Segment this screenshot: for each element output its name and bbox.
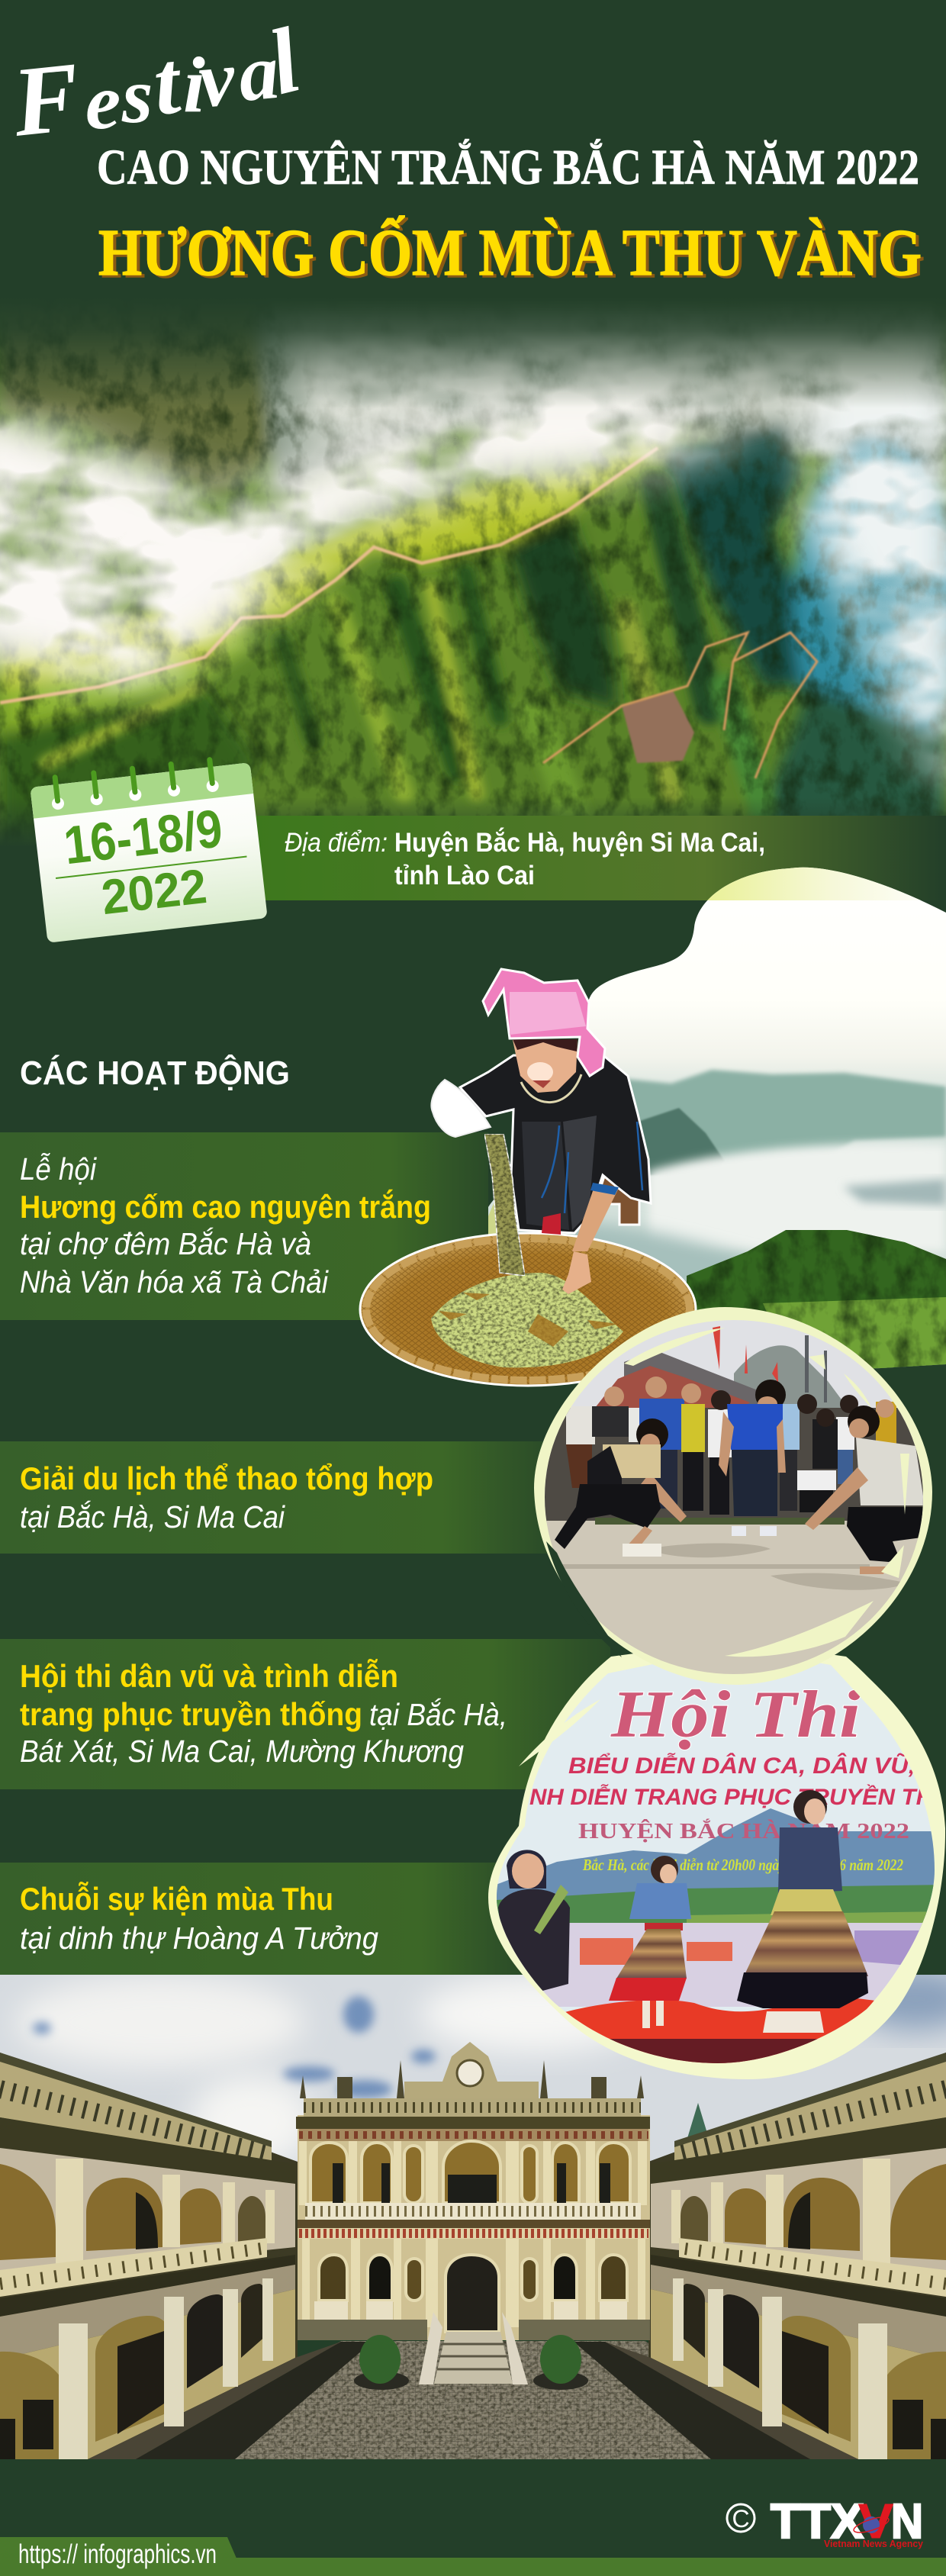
concrete ground: [534, 1521, 938, 1685]
lower columns: [59, 2278, 273, 2459]
ribs of the mountain: [46, 488, 763, 832]
banner line 1: BIỂU DIỄN DÂN CA, DÂN VŨ,: [568, 1753, 915, 1779]
bottom fade: [0, 797, 946, 847]
red embroidery: [542, 1213, 561, 1235]
copyright symbol: [727, 2504, 755, 2533]
red stage: [488, 1997, 946, 2068]
hero photo: mountain road in mist: [0, 298, 946, 847]
title: Festival handwriting: i: [183, 41, 205, 129]
activity band 1: [0, 1132, 488, 1320]
title: Festival handwriting: s: [121, 52, 153, 140]
upper arches: [311, 2141, 630, 2203]
dark walkway strip: [136, 2342, 372, 2459]
activity 1 text: tại chợ đêm Bắc Hà và: [20, 1226, 311, 1261]
frame: [534, 1307, 932, 1685]
activity 3 text: trang phục truyền thống: [20, 1696, 362, 1732]
town field: [488, 1923, 946, 2007]
banner title: Hội Thi: [610, 1678, 861, 1752]
courtyard paving: [145, 2341, 809, 2459]
dark peak: [638, 1108, 725, 1175]
lower frieze: [0, 2265, 295, 2359]
roof balustrades: [304, 2098, 641, 2117]
roof balustrade: [0, 2060, 272, 2164]
stool: [595, 1158, 639, 1225]
date: 16-18/9: [61, 798, 225, 875]
upper frieze: [299, 2129, 648, 2141]
activity 1 text: [20, 1151, 431, 1299]
activity 4 text: Chuỗi sự kiện mùa Thu: [20, 1880, 333, 1917]
ridge road: [0, 448, 658, 703]
title: Festival handwriting: t: [149, 32, 187, 134]
activity 1 text: Nhà Văn hóa xã Tà Chải: [20, 1264, 330, 1299]
TTXVN logo: TTX: [771, 2494, 864, 2549]
location text line 2: tỉnh Lào Cai: [394, 861, 535, 890]
child dancer: [609, 1856, 691, 2028]
top fade: [0, 298, 946, 408]
walkway: [88, 2342, 341, 2459]
upper dark openings: [333, 2163, 610, 2203]
bridge deck: [592, 1366, 750, 1412]
location band: [256, 816, 946, 900]
potted plants: [354, 2335, 588, 2390]
hillside colour masses: [0, 298, 946, 847]
crowd backdrop: [543, 1408, 928, 1522]
upper frieze: [0, 2148, 295, 2278]
activity 3 text: Bát Xát, Si Ma Cai, Mường Khương: [20, 1734, 464, 1769]
sea of clouds: [648, 1144, 946, 1251]
bare arm: [572, 1184, 618, 1251]
centre player: [719, 1380, 786, 1536]
bamboo pole: [595, 1518, 845, 1525]
activity band 2: [0, 1441, 553, 1554]
mist clouds: [0, 305, 946, 794]
title: Festival handwriting: v: [195, 34, 240, 124]
lower frieze: [299, 2228, 648, 2239]
base: [298, 2320, 427, 2340]
terraced field: [763, 1297, 946, 1373]
url text: https:// infographics.vn: [18, 2539, 217, 2569]
upper arches: [0, 2164, 56, 2260]
activity band 4: [0, 1863, 526, 1975]
TTXVN logo: [771, 2494, 924, 2549]
divider: [56, 856, 246, 878]
frame: [488, 1641, 945, 2079]
mountains: [496, 1808, 946, 1923]
cornice: [296, 2117, 650, 2129]
dark cornice: [0, 2255, 295, 2317]
face: [513, 1040, 578, 1093]
necklace: [521, 1074, 581, 1103]
calendar date card: [29, 752, 268, 943]
title block: [7, 8, 925, 291]
sky: [0, 1975, 946, 2162]
green hills: [687, 1230, 946, 1373]
activities heading: CÁC HOẠT ĐỘNG: [20, 1053, 290, 1092]
bottom strip: [0, 2558, 946, 2576]
activity 4 text: tại dinh thự Hoàng A Tưởng: [20, 1921, 378, 1956]
title: Festival handwriting: F: [7, 42, 85, 158]
agency name: Vietnam News Agency: [824, 2538, 924, 2549]
location text line 1: Huyện Bắc Hà, huyện Si Ma Cai,: [394, 827, 765, 858]
activity 1 text: Hương cốm cao nguyên trắng: [20, 1188, 431, 1225]
white bowl: [431, 1080, 491, 1137]
TTXVN logo: N: [891, 2494, 923, 2549]
right player: [805, 1406, 925, 1574]
woman pouring green rice into tray: [360, 969, 696, 1386]
portrait woman left: [498, 1850, 570, 1993]
cornice: [0, 2117, 295, 2184]
adult dancer: [737, 1790, 868, 2033]
right wing: [574, 2053, 946, 2459]
photo: [488, 1641, 946, 2069]
frame dark gap: [546, 1541, 622, 1657]
valley roads: [543, 633, 817, 778]
hand: [562, 1251, 591, 1294]
courtyard mansion photo: [0, 1969, 946, 2459]
copyright symbol: C: [732, 2505, 750, 2533]
far mountains: [629, 1067, 946, 1160]
upper balustrade: [305, 2203, 641, 2220]
lower wall: [0, 2289, 295, 2459]
lower arches: [0, 2352, 69, 2459]
blue sky patches: [33, 1996, 436, 2098]
activity 2 text: [20, 1460, 433, 1534]
year: 2022: [98, 858, 210, 925]
activity 2 text: Giải du lịch thể thao tổng hợp: [20, 1460, 433, 1496]
activity 2 text: tại Bắc Hà, Si Ma Cai: [20, 1499, 286, 1534]
bridge railing: [624, 1351, 758, 1406]
green rice: [431, 1273, 623, 1367]
circular photo: folk performance contest: [488, 1641, 946, 2079]
distant hill: [734, 1345, 852, 1414]
entrance stairs: [434, 2332, 513, 2384]
banner line 2: NH DIỄN TRANG PHỤC TRUYỀN TH: [529, 1784, 934, 1810]
title: Festival handwriting: e: [85, 58, 121, 146]
central facade: [296, 2042, 650, 2340]
frame swish: [519, 1699, 600, 1766]
TTXVN logo: V: [858, 2494, 893, 2549]
title: Festival handwriting: a: [235, 27, 282, 118]
frame swishes: [624, 1328, 909, 1657]
activity 3 text: tại Bắc Hà,: [369, 1697, 507, 1732]
left wing: [0, 2053, 372, 2459]
pediment and clock: [404, 2042, 539, 2098]
red flags: [713, 1326, 778, 1383]
photo: [534, 1312, 938, 1685]
url tab: [0, 2537, 244, 2576]
left player: [555, 1418, 687, 1557]
circular photo: bamboo pole sports game: [534, 1307, 938, 1685]
activity 1 text: Lễ hội: [20, 1151, 98, 1187]
title: Festival handwriting: l: [259, 8, 310, 114]
winnowing tray: [360, 1233, 696, 1386]
location label: Địa điểm:: [285, 828, 388, 858]
lower arches: [319, 2255, 627, 2332]
street lamps: [805, 1335, 827, 1402]
lower balustrade: [314, 2301, 627, 2320]
pink headscarf: [483, 969, 605, 1076]
activity 4 text: [20, 1880, 378, 1956]
lower columns: [302, 2239, 645, 2327]
brown field: [622, 691, 694, 763]
footer: [0, 2494, 946, 2576]
spectators: [566, 1377, 896, 1515]
activity 3 text: Hội thi dân vũ và trình diễn: [20, 1657, 398, 1694]
stair railings: [419, 2312, 528, 2384]
landscape photo in organic blob: [473, 862, 946, 1377]
spires: [300, 2060, 644, 2098]
upper columns: [56, 2159, 275, 2284]
upper columns: [299, 2141, 647, 2205]
banner line 3: HUYỆN BẮC HÀ NĂM 2022: [578, 1818, 909, 1843]
activity 3 text: [20, 1657, 507, 1769]
pine tree: [685, 2103, 711, 2146]
upper balustrade: [0, 2238, 267, 2297]
falling rice stream: [484, 1134, 525, 1276]
activity band 3: [0, 1639, 610, 1789]
calendar rings: [49, 756, 220, 810]
globe: [863, 2516, 880, 2533]
black dress: [460, 1055, 651, 1233]
